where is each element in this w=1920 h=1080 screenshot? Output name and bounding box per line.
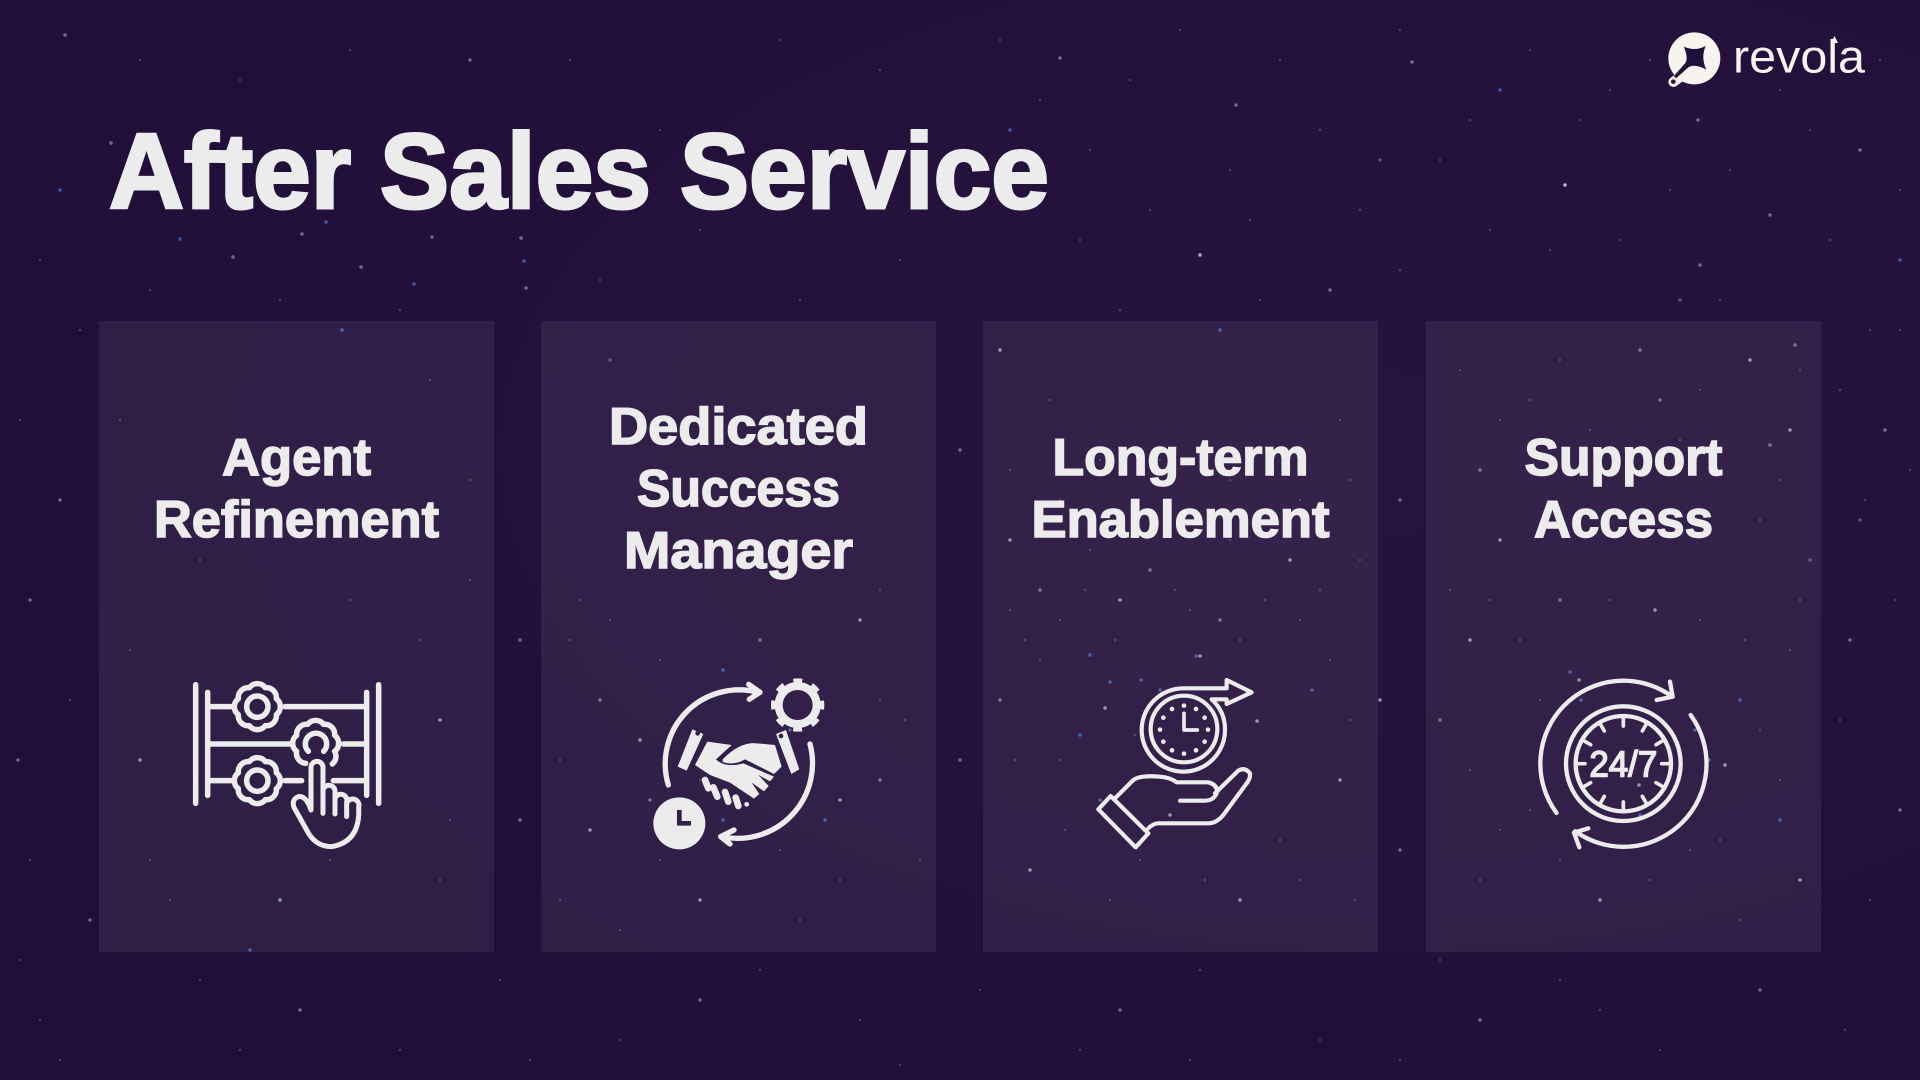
icon: 24/7 clock with cycle arrows: 24/7	[1589, 744, 1657, 785]
panel: Agent Refinement	[99, 321, 494, 952]
panel: Support Access	[1426, 321, 1821, 952]
icon: 24/7 clock with cycle arrows	[1540, 681, 1707, 847]
icon: logo mark	[1668, 32, 1720, 84]
heading: Dedicated Success Manager: Manager	[624, 522, 853, 580]
heading: Long-term Enablement: Enablement	[1032, 491, 1330, 549]
icon: gears with pointing hand	[196, 684, 379, 847]
heading: Agent Refinement: Agent	[222, 429, 371, 487]
heading: Long-term Enablement: Long-term	[1052, 429, 1308, 487]
heading: Dedicated Success Manager: Dedicated	[609, 398, 868, 456]
panel: Dedicated Success Manager	[541, 321, 936, 952]
heading: Agent Refinement: Refinement	[154, 491, 439, 549]
title: After Sales Service	[109, 111, 1049, 231]
logo wordmark: revola	[1733, 30, 1865, 82]
icon: clock over open hand	[1098, 680, 1252, 847]
heading: Support Access: Support	[1524, 429, 1722, 487]
logo: revola	[1668, 30, 1865, 84]
heading: Support Access	[1524, 429, 1722, 549]
heading: Dedicated Success Manager: Success	[637, 460, 840, 518]
heading: Long-term Enablement	[1032, 429, 1330, 549]
heading: Agent Refinement	[154, 429, 439, 549]
heading: Dedicated Success Manager	[609, 398, 868, 580]
panel: Long-term Enablement	[983, 321, 1378, 952]
icon: handshake with cycle, gear and clock	[653, 681, 822, 849]
heading: Support Access: Access	[1534, 491, 1713, 549]
